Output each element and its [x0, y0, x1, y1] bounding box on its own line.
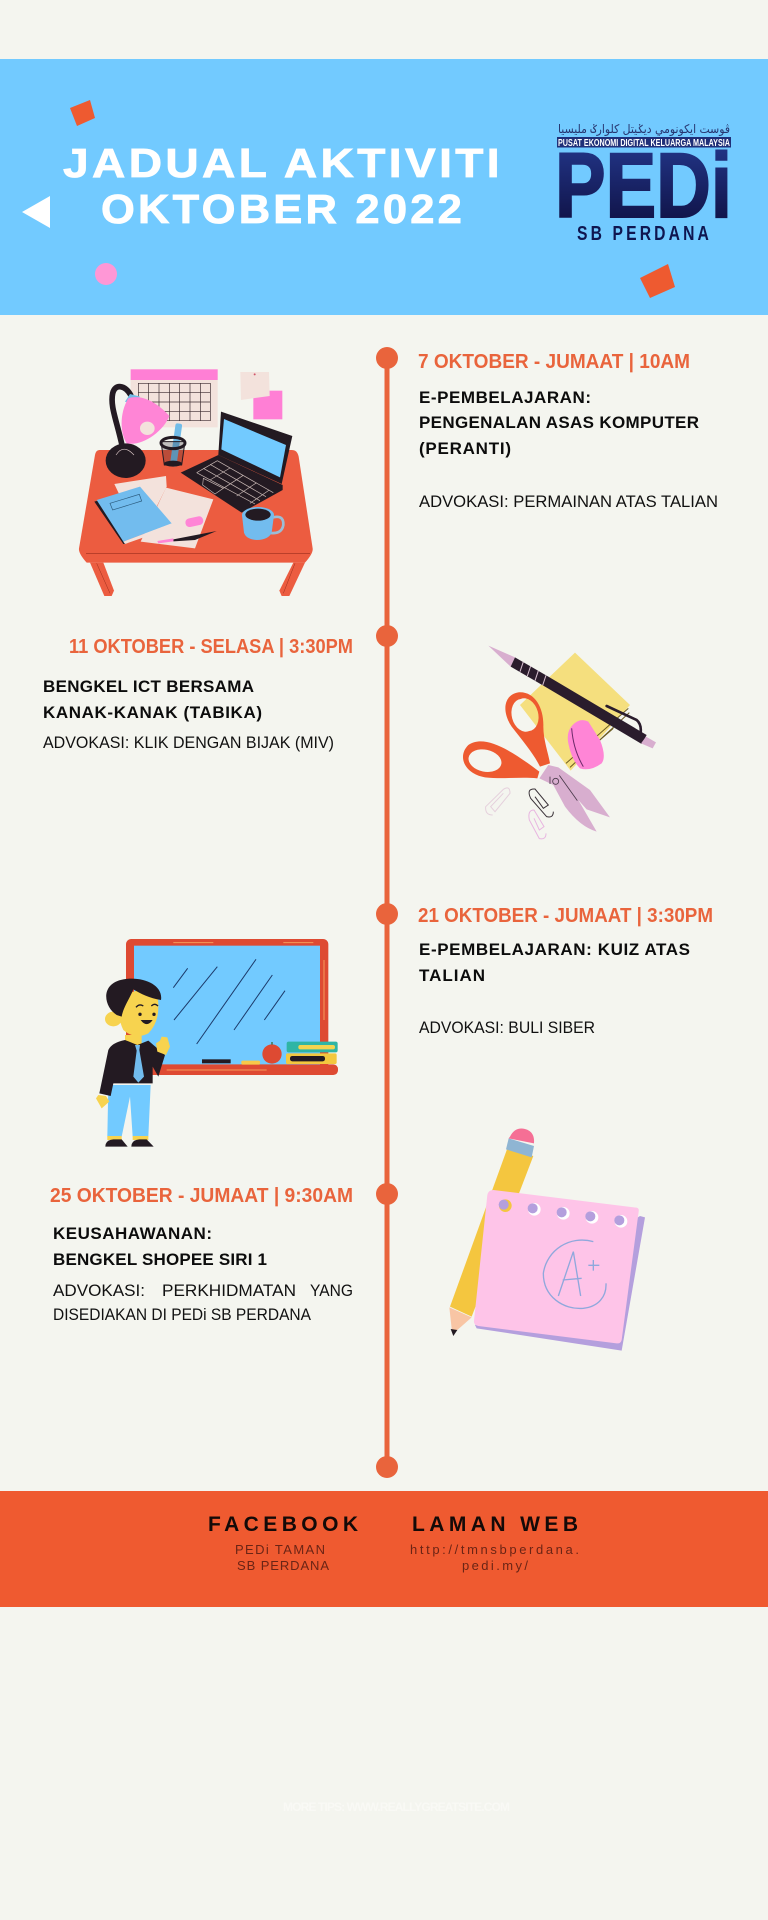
event: 11 Oktober [43, 636, 353, 752]
calendar [131, 369, 218, 427]
mechanical pencil [488, 646, 656, 748]
footer: Facebook [208, 1513, 358, 1573]
binder holes [499, 1199, 627, 1228]
event: 25 Oktober: YANG [310, 1282, 353, 1300]
pink eraser [568, 720, 604, 769]
coffee mug [242, 507, 283, 540]
header panel [0, 59, 768, 315]
footer: Laman Web: LAMAN WEB [412, 1513, 578, 1536]
footer: Facebook: SB PERDANA [237, 1558, 329, 1573]
event: 11 Oktober: ADVOKASI: KLIK DENGAN BIJAK (MIV) [43, 734, 334, 752]
purple back sheet [475, 1216, 645, 1351]
event: 25 Oktober: BENGKEL SHOPEE SIRI 1 [53, 1250, 267, 1269]
footer: Facebook: FACEBOOK [208, 1513, 358, 1536]
event: 21 Oktober: ADVOKASI: BULI SIBER [419, 1019, 595, 1037]
event: 25 Oktober: DISEDIAKAN DI PEDi SB PERDANA [53, 1306, 311, 1324]
illustration: teacher at whiteboard [96, 939, 338, 1147]
event: 25 Oktober: ADVOKASI: [53, 1282, 145, 1300]
paper clips [486, 788, 553, 839]
event: 25 Oktober: KEUSAHAWANAN: [53, 1224, 212, 1243]
decorative pink circle [95, 263, 117, 285]
pink note sheet [474, 1190, 639, 1343]
footer: Laman Web: http://tmnsbperdana. [410, 1542, 579, 1557]
event: 11 Oktober: BENGKEL ICT BERSAMA [43, 677, 254, 696]
event: 7 Oktober: (PERANTI) [419, 439, 511, 458]
apple [262, 1042, 282, 1064]
A plus grade [543, 1240, 606, 1308]
board [126, 939, 338, 1075]
event: 21 Oktober: TALIAN [419, 966, 485, 985]
event: 11 Oktober: KANAK-KANAK (TABIKA) [43, 703, 262, 722]
footer: Laman Web [410, 1513, 579, 1573]
timeline [376, 347, 398, 1478]
event: 25 Oktober: PERKHIDMATAN [162, 1282, 296, 1300]
event: 21 Oktober [418, 905, 713, 1037]
sticky notes [240, 372, 282, 419]
decorative orange diamond bottom right [640, 264, 675, 298]
faint watermark: MORE TIPS: WWW.REALLYGREATSITE.COM [283, 1800, 510, 1814]
footer: Facebook: PEDi TAMAN [235, 1542, 325, 1557]
stack of books [286, 1042, 338, 1064]
title: OKTOBER 2022 [101, 186, 465, 232]
event: 21 Oktober: 21 OKTOBER - JUMAAT | 3:30PM [418, 905, 713, 927]
event: 11 Oktober: 11 OKTOBER - SELASA | 3:30PM [69, 636, 353, 658]
title: JADUAL AKTIVITI [63, 140, 503, 186]
event: 21 Oktober: E-PEMBELAJARAN: KUIZ ATAS [419, 940, 690, 959]
desk lamp [106, 387, 169, 478]
scissors [463, 692, 610, 832]
footer: Laman Web: pedi.my/ [462, 1558, 528, 1573]
laptop [181, 412, 292, 513]
yellow note pad [520, 653, 630, 771]
event: 7 Oktober: ADVOKASI: PERMAINAN ATAS TALIAN [419, 493, 718, 511]
event: 7 Oktober: PENGENALAN ASAS KOMPUTER [419, 413, 699, 432]
logo: PEDi SB Perdana: SB PERDANA [577, 223, 712, 245]
event: 25 Oktober [50, 1185, 353, 1324]
table [79, 450, 313, 596]
title [63, 140, 503, 232]
logo: PEDi SB Perdana: PEDi [555, 135, 732, 237]
decorative white triangle [22, 196, 50, 228]
pencil [449, 1129, 534, 1336]
papers and notebook [94, 476, 213, 548]
event: 25 Oktober: 25 OKTOBER - JUMAAT | 9:30AM [50, 1185, 353, 1207]
event: 7 Oktober: 7 OKTOBER - JUMAAT | 10AM [418, 351, 690, 373]
logo: PEDi SB Perdana: ڤوست ايكونومي ديݢيتل كلوارݢ مليسيا [558, 122, 730, 137]
pen cup [161, 423, 185, 467]
footer panel [0, 1491, 768, 1607]
teacher [96, 979, 170, 1147]
eraser and pen [157, 516, 217, 543]
decorative orange diamond top left [70, 100, 95, 126]
illustration: scissors and stationery [463, 646, 656, 839]
event: 7 Oktober [418, 351, 718, 511]
event: 7 Oktober: E-PEMBELAJARAN: [419, 388, 591, 407]
illustration: desk with laptop [79, 369, 313, 596]
illustration: pencil and graded note [449, 1129, 645, 1351]
